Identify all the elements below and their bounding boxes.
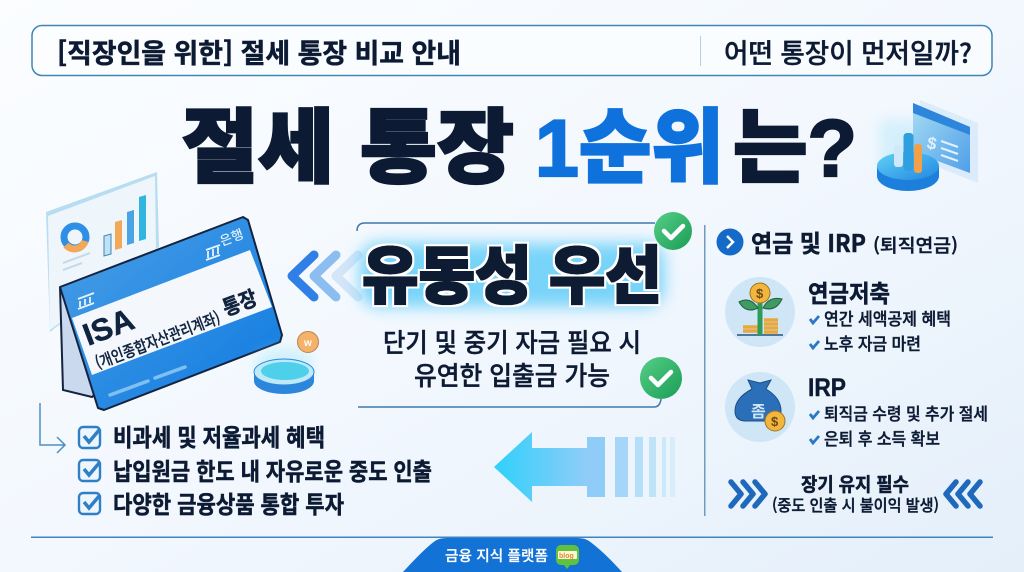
icon: green check top bbox=[654, 212, 692, 250]
ISA benefit list bbox=[79, 418, 432, 520]
elbow arrow bbox=[40, 403, 65, 453]
pension heading bbox=[716, 224, 958, 259]
IRP item: IRP bbox=[808, 374, 846, 402]
panel: pension and IRP bbox=[716, 224, 988, 516]
liquidity description: 단기 및 중기 자금 필요 시 bbox=[383, 323, 641, 360]
note chevrons right-pointing bbox=[731, 482, 765, 506]
header title: [직장인을 위한] 절세 통장 비교 안내 bbox=[57, 32, 461, 71]
card label: ISA: ISA bbox=[78, 302, 139, 353]
IRP item: 퇴직금 수령 및 추가 절세 bbox=[824, 400, 988, 425]
icon: money bag: 좀 bbox=[751, 398, 766, 422]
icon: coin and disc: w bbox=[303, 338, 312, 349]
footer line bbox=[31, 536, 993, 538]
card label: bankbook: 통장 bbox=[218, 282, 261, 323]
chart panel behind the card bbox=[46, 172, 159, 332]
main title: 1순위 bbox=[535, 104, 724, 194]
panel: liquidity first bbox=[357, 212, 692, 407]
liquidity description: 유연한 입출금 가능 bbox=[414, 356, 610, 393]
big left arrow bbox=[494, 432, 675, 502]
main title bbox=[182, 104, 857, 194]
benefit 2: 납입원금 한도 내 자유로운 중도 인출 bbox=[113, 452, 432, 487]
pension heading: (퇴직연금) bbox=[873, 232, 958, 258]
long-term note bbox=[772, 470, 939, 516]
illustration: ISA bankbook card bbox=[46, 172, 282, 410]
benefit 3: 다양한 금융상품 통합 투자 bbox=[113, 485, 344, 520]
savings item: 노후 자금 마련 bbox=[824, 330, 921, 355]
header bar bbox=[32, 26, 992, 76]
footer tab: 금융 지식 플랫폼 bbox=[445, 545, 548, 566]
IRP item bbox=[808, 374, 988, 450]
savings item: 연간 세액공제 혜택 bbox=[824, 305, 951, 330]
savings item bbox=[808, 274, 951, 355]
main title: 통장 bbox=[360, 104, 514, 194]
icon: blog badge bbox=[556, 545, 579, 569]
icon: money bag: $ bbox=[771, 414, 779, 429]
pension heading: 연금 및 IRP bbox=[751, 224, 866, 259]
long-term note: (중도 인출 시 불이익 발생) bbox=[772, 492, 939, 516]
card label: account name: (개인종합자산관리계좌) bbox=[91, 305, 223, 374]
left chevrons bbox=[292, 255, 358, 297]
main title: 절세 bbox=[182, 104, 334, 194]
liquidity description bbox=[383, 323, 641, 393]
long-term note: 장기 유지 필수 bbox=[801, 470, 909, 497]
footer tab bbox=[403, 538, 622, 572]
icon: coin plant bbox=[725, 277, 795, 347]
vertical divider bbox=[704, 225, 706, 516]
liquidity heading: 유동성 우선 bbox=[362, 226, 662, 317]
icon: chart and window illustration bbox=[877, 100, 978, 191]
icon: coin and disc bbox=[254, 332, 318, 394]
icon: chart and window illustration: $ bbox=[925, 133, 939, 154]
icon: coin plant: $ bbox=[756, 286, 764, 301]
IRP item: 은퇴 후 소득 확보 bbox=[824, 425, 940, 450]
note chevrons left-pointing bbox=[946, 482, 980, 506]
card label: bank: 은행 bbox=[217, 224, 246, 250]
savings item: 연금저축 bbox=[808, 274, 890, 309]
benefit 1: 비과세 및 저율과세 혜택 bbox=[113, 418, 325, 453]
icon: green check bottom bbox=[640, 357, 682, 399]
icon: blog badge: blog bbox=[559, 553, 574, 560]
icon: money bag bbox=[725, 372, 795, 442]
header question: 어떤 통장이 먼저일까? bbox=[724, 32, 972, 71]
main title: 는? bbox=[733, 104, 857, 194]
